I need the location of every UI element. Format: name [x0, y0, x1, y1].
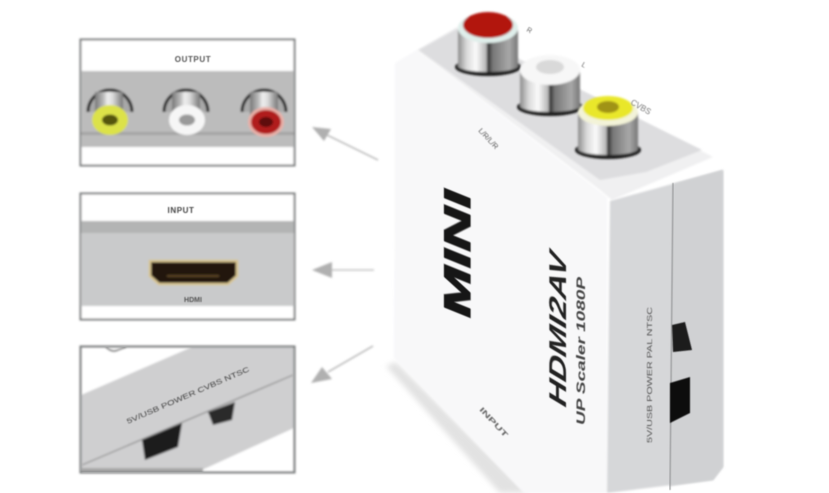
icon: HDMI socket	[150, 261, 237, 284]
connector: red RCA	[455, 12, 521, 76]
connector: yellow output	[88, 90, 132, 135]
label: R channel: R	[525, 27, 533, 35]
icon: slide switch	[208, 402, 235, 425]
port labels: power and TV system: 5V/USB POWER CVBS NTSC	[125, 364, 251, 426]
device top bevel	[417, 27, 713, 200]
device shadow	[386, 362, 528, 493]
icon: side slide switch	[672, 322, 692, 352]
logo: MINI: MINI	[437, 182, 479, 324]
infographic canvas	[78, 10, 724, 493]
title: HDMI2AV: HDMI2AV	[546, 245, 572, 410]
panel heading: input: INPUT	[168, 206, 194, 215]
subtitle: up scaler: UP Scaler 1080P	[576, 276, 588, 425]
panel: side switch and power	[80, 346, 295, 474]
panel: output ports	[80, 40, 294, 166]
icon: mini USB port	[142, 423, 182, 460]
connector: white RCA	[517, 55, 583, 116]
label: input: INPUT	[478, 405, 511, 440]
device side face	[607, 170, 723, 493]
port label: HDMI: HDMI	[184, 297, 202, 304]
connector: white output	[164, 90, 208, 135]
label: CVBS: CVBS	[629, 98, 652, 117]
product: HDMI2AV converter	[386, 12, 723, 493]
panel: HDMI input	[80, 194, 294, 320]
arrow: to input panel	[312, 262, 374, 278]
label: side power and TV system: 5V/USB POWER PAL NTSC	[645, 306, 654, 443]
arrow: to side panel	[311, 346, 373, 383]
icon: side mini USB port	[670, 377, 690, 423]
connector: red output	[242, 90, 286, 137]
arrow: to output panel	[312, 127, 378, 160]
device top ports strip	[419, 29, 702, 180]
connector: yellow RCA	[575, 96, 641, 159]
label: L channel: L	[580, 62, 587, 70]
device front face	[394, 50, 607, 493]
panel heading: output: OUTPUT	[175, 55, 211, 64]
label: L/R video: L/R/L/R	[477, 126, 501, 151]
